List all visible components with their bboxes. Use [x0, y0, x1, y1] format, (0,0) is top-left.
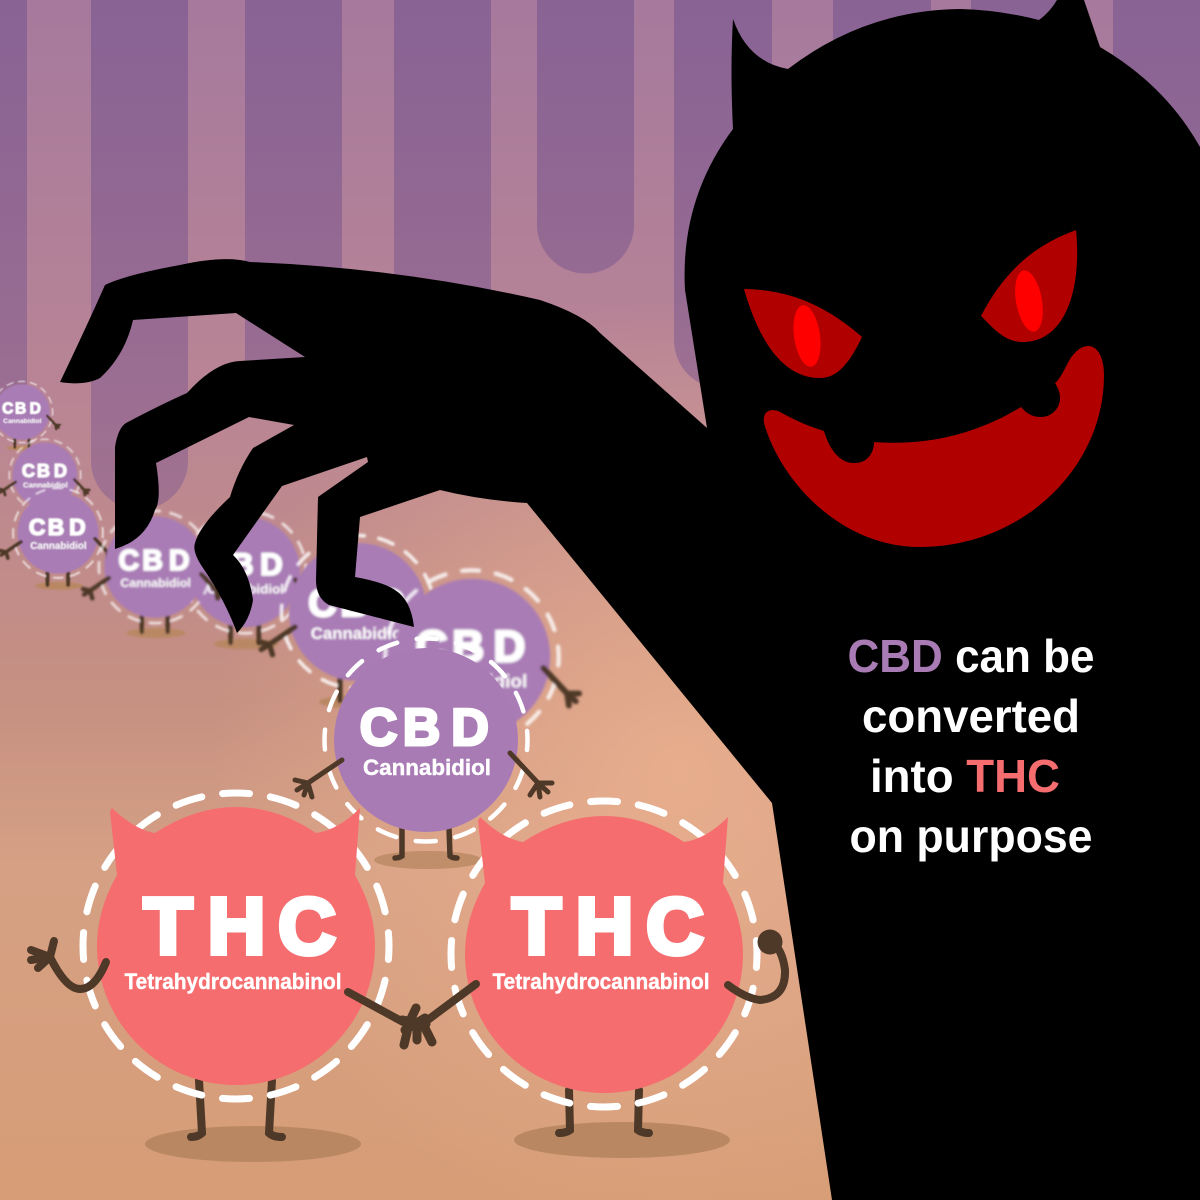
distant CBD figure 6: Cannabidiol — [311, 625, 407, 643]
right eye — [981, 230, 1077, 342]
THC character left — [31, 793, 403, 1162]
THC character right: Tetrahydrocannabinol — [492, 969, 710, 994]
mouth — [764, 346, 1104, 547]
distant CBD figure 5: CBD — [205, 547, 283, 582]
distant CBD figure 7: CBD — [416, 622, 525, 671]
distant CBD figure 7 — [361, 570, 579, 767]
background stripes — [0, 0, 1200, 510]
distant CBD figure 2 — [0, 439, 89, 520]
distant CBD figure 4: Cannabidiol — [120, 576, 191, 590]
distant CBD figure 2: Cannabidiol — [23, 481, 68, 490]
THC character left: THC — [144, 882, 336, 970]
distant CBD figure 5 — [166, 511, 321, 649]
distant CBD figure 6: CBD — [308, 582, 405, 625]
caption: on purpose — [850, 810, 1092, 862]
main CBD character — [295, 638, 552, 869]
main CBD character: CBD — [360, 699, 489, 757]
distant CBD figure 4: CBD — [119, 545, 190, 577]
caption: converted — [862, 690, 1080, 742]
THC character left: Tetrahydrocannabinol — [124, 969, 342, 994]
caption: into THC — [870, 750, 1060, 802]
THC character right — [402, 801, 785, 1158]
distant CBD figure 6 — [260, 536, 452, 709]
left eye — [744, 289, 862, 378]
caption: CBD can be — [848, 630, 1094, 682]
THC character right: THC — [512, 882, 704, 970]
distant CBD figure 3: CBD — [29, 514, 86, 540]
distant CBD figure 3 — [0, 488, 113, 590]
main CBD character: Cannabidiol — [363, 755, 491, 780]
distant CBD figure 5: Cannabidiol — [207, 582, 284, 597]
distant CBD figure 7: Cannabidiol — [418, 671, 527, 692]
distant CBD figure 1: Cannabidiol — [3, 418, 42, 425]
distant CBD figure 2: CBD — [22, 461, 67, 481]
caption — [848, 630, 1094, 862]
distant CBD figure 1 — [0, 381, 60, 451]
distant CBD figure 4 — [83, 511, 224, 638]
distant CBD figure 3: Cannabidiol — [30, 541, 87, 552]
distant CBD figure 1: CBD — [2, 400, 41, 417]
